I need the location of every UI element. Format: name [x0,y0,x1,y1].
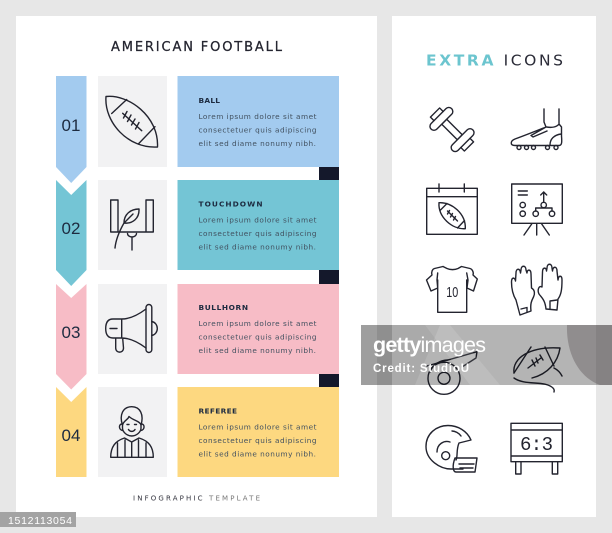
card: touchdown: elit sed diame nonumy nibh. [198,242,316,252]
card: ball: elit sed diame nonumy nibh. [198,139,316,148]
icon: playbook board [512,184,562,235]
card: bullhorn: consectetuer quis adipiscing [198,332,316,342]
panel: left infographic [16,16,377,517]
number 04: 04 [62,426,80,445]
icon: gloves [512,264,562,315]
number 01: 01 [62,116,80,135]
score: 6:3 [520,434,553,456]
watermark logo: gettyimages [373,333,486,357]
icon: dumbbell [425,102,479,157]
icon: ball [106,96,158,147]
icon tiles [98,76,167,477]
icon: calendar with ball [427,184,477,234]
jersey number: 10 [446,284,458,301]
card: referee [178,387,339,477]
icon: bullhorn [106,304,157,352]
card: bullhorn [178,284,339,374]
image id tag: 1512113054 [8,515,72,527]
step 04 arrow [56,387,86,477]
icon: jersey [426,266,477,312]
icon: goal post [111,200,153,250]
watermark credit: Credit: StudioU [373,363,469,375]
card: touchdown: TOUCHDOWN [198,200,262,208]
watermark band [361,325,612,385]
card: touchdown: Lorem ipsum dolore sit amet [198,216,317,224]
card: touchdown: consectetuer quis adipiscing [198,229,316,238]
step 03 arrow [56,284,86,390]
card: bullhorn: elit sed diame nonumy nibh. [198,346,316,355]
card: ball: consectetuer quis adipiscing [198,126,316,134]
card: referee: elit sed diame nonumy nibh. [198,450,316,458]
title: AMERICAN FOOTBALL [111,40,283,55]
card: ball: BALL [198,96,220,105]
footer caption: INFOGRAPHIC TEMPLATE [133,494,260,502]
card: referee: consectetuer quis adipiscing [198,436,316,445]
card: bullhorn: Lorem ipsum dolore sit amet [198,319,317,328]
icon: ball in hand [514,347,562,392]
number 03: 03 [62,323,80,342]
step 01 arrow [56,76,86,183]
icon: helmet [426,426,477,472]
icon: whistle [427,352,477,394]
card: bullhorn: BULLHORN [198,303,248,312]
icon: referee [111,407,153,457]
card: referee: Lorem ipsum dolore sit amet [198,422,317,432]
panel: extra icons [392,16,596,517]
icon: cleat [511,109,562,150]
connector squares [319,167,339,387]
icon: scoreboard [511,423,562,474]
number 02: 02 [62,219,80,238]
card: ball [178,76,339,167]
card: touchdown [178,180,339,270]
heading: EXTRA ICONS [426,52,563,70]
card: ball: Lorem ipsum dolore sit amet [198,112,317,121]
card: referee: REFEREE [198,406,237,416]
image id tag [0,512,76,527]
step 02 arrow [56,180,86,286]
